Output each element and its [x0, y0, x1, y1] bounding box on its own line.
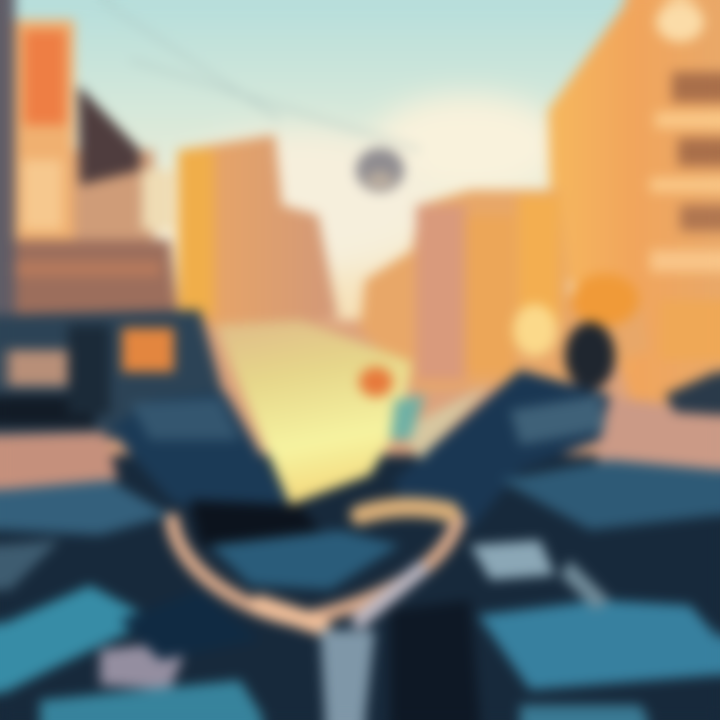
- lower area base: [0, 370, 720, 720]
- warm backing behind street: [0, 320, 720, 480]
- lower right blue tiles: [470, 460, 720, 720]
- tan ring: hands and wrist band: [172, 507, 458, 625]
- sky background: [0, 0, 720, 360]
- storefront: left dark shop: [0, 310, 225, 440]
- blue panel: inside ring: [210, 530, 400, 590]
- hanging street lamp: [356, 148, 404, 192]
- building: centre right block: [360, 190, 650, 390]
- centre bottom: pale wrist column: [120, 590, 480, 720]
- building: centre block: [178, 135, 338, 330]
- building: left orange tower: [14, 20, 74, 245]
- dark sleeve: left arm: [110, 392, 330, 545]
- street pole: [0, 0, 15, 440]
- held card: [215, 320, 490, 505]
- card red dot: [359, 367, 393, 397]
- building: dark roof and tan facade: [0, 85, 178, 315]
- lower left blue tiles: [0, 480, 265, 720]
- building: far right tower: [548, 0, 720, 430]
- pavement: pink ground on left: [0, 432, 118, 490]
- dark sleeve and figure: right arm: [395, 322, 615, 530]
